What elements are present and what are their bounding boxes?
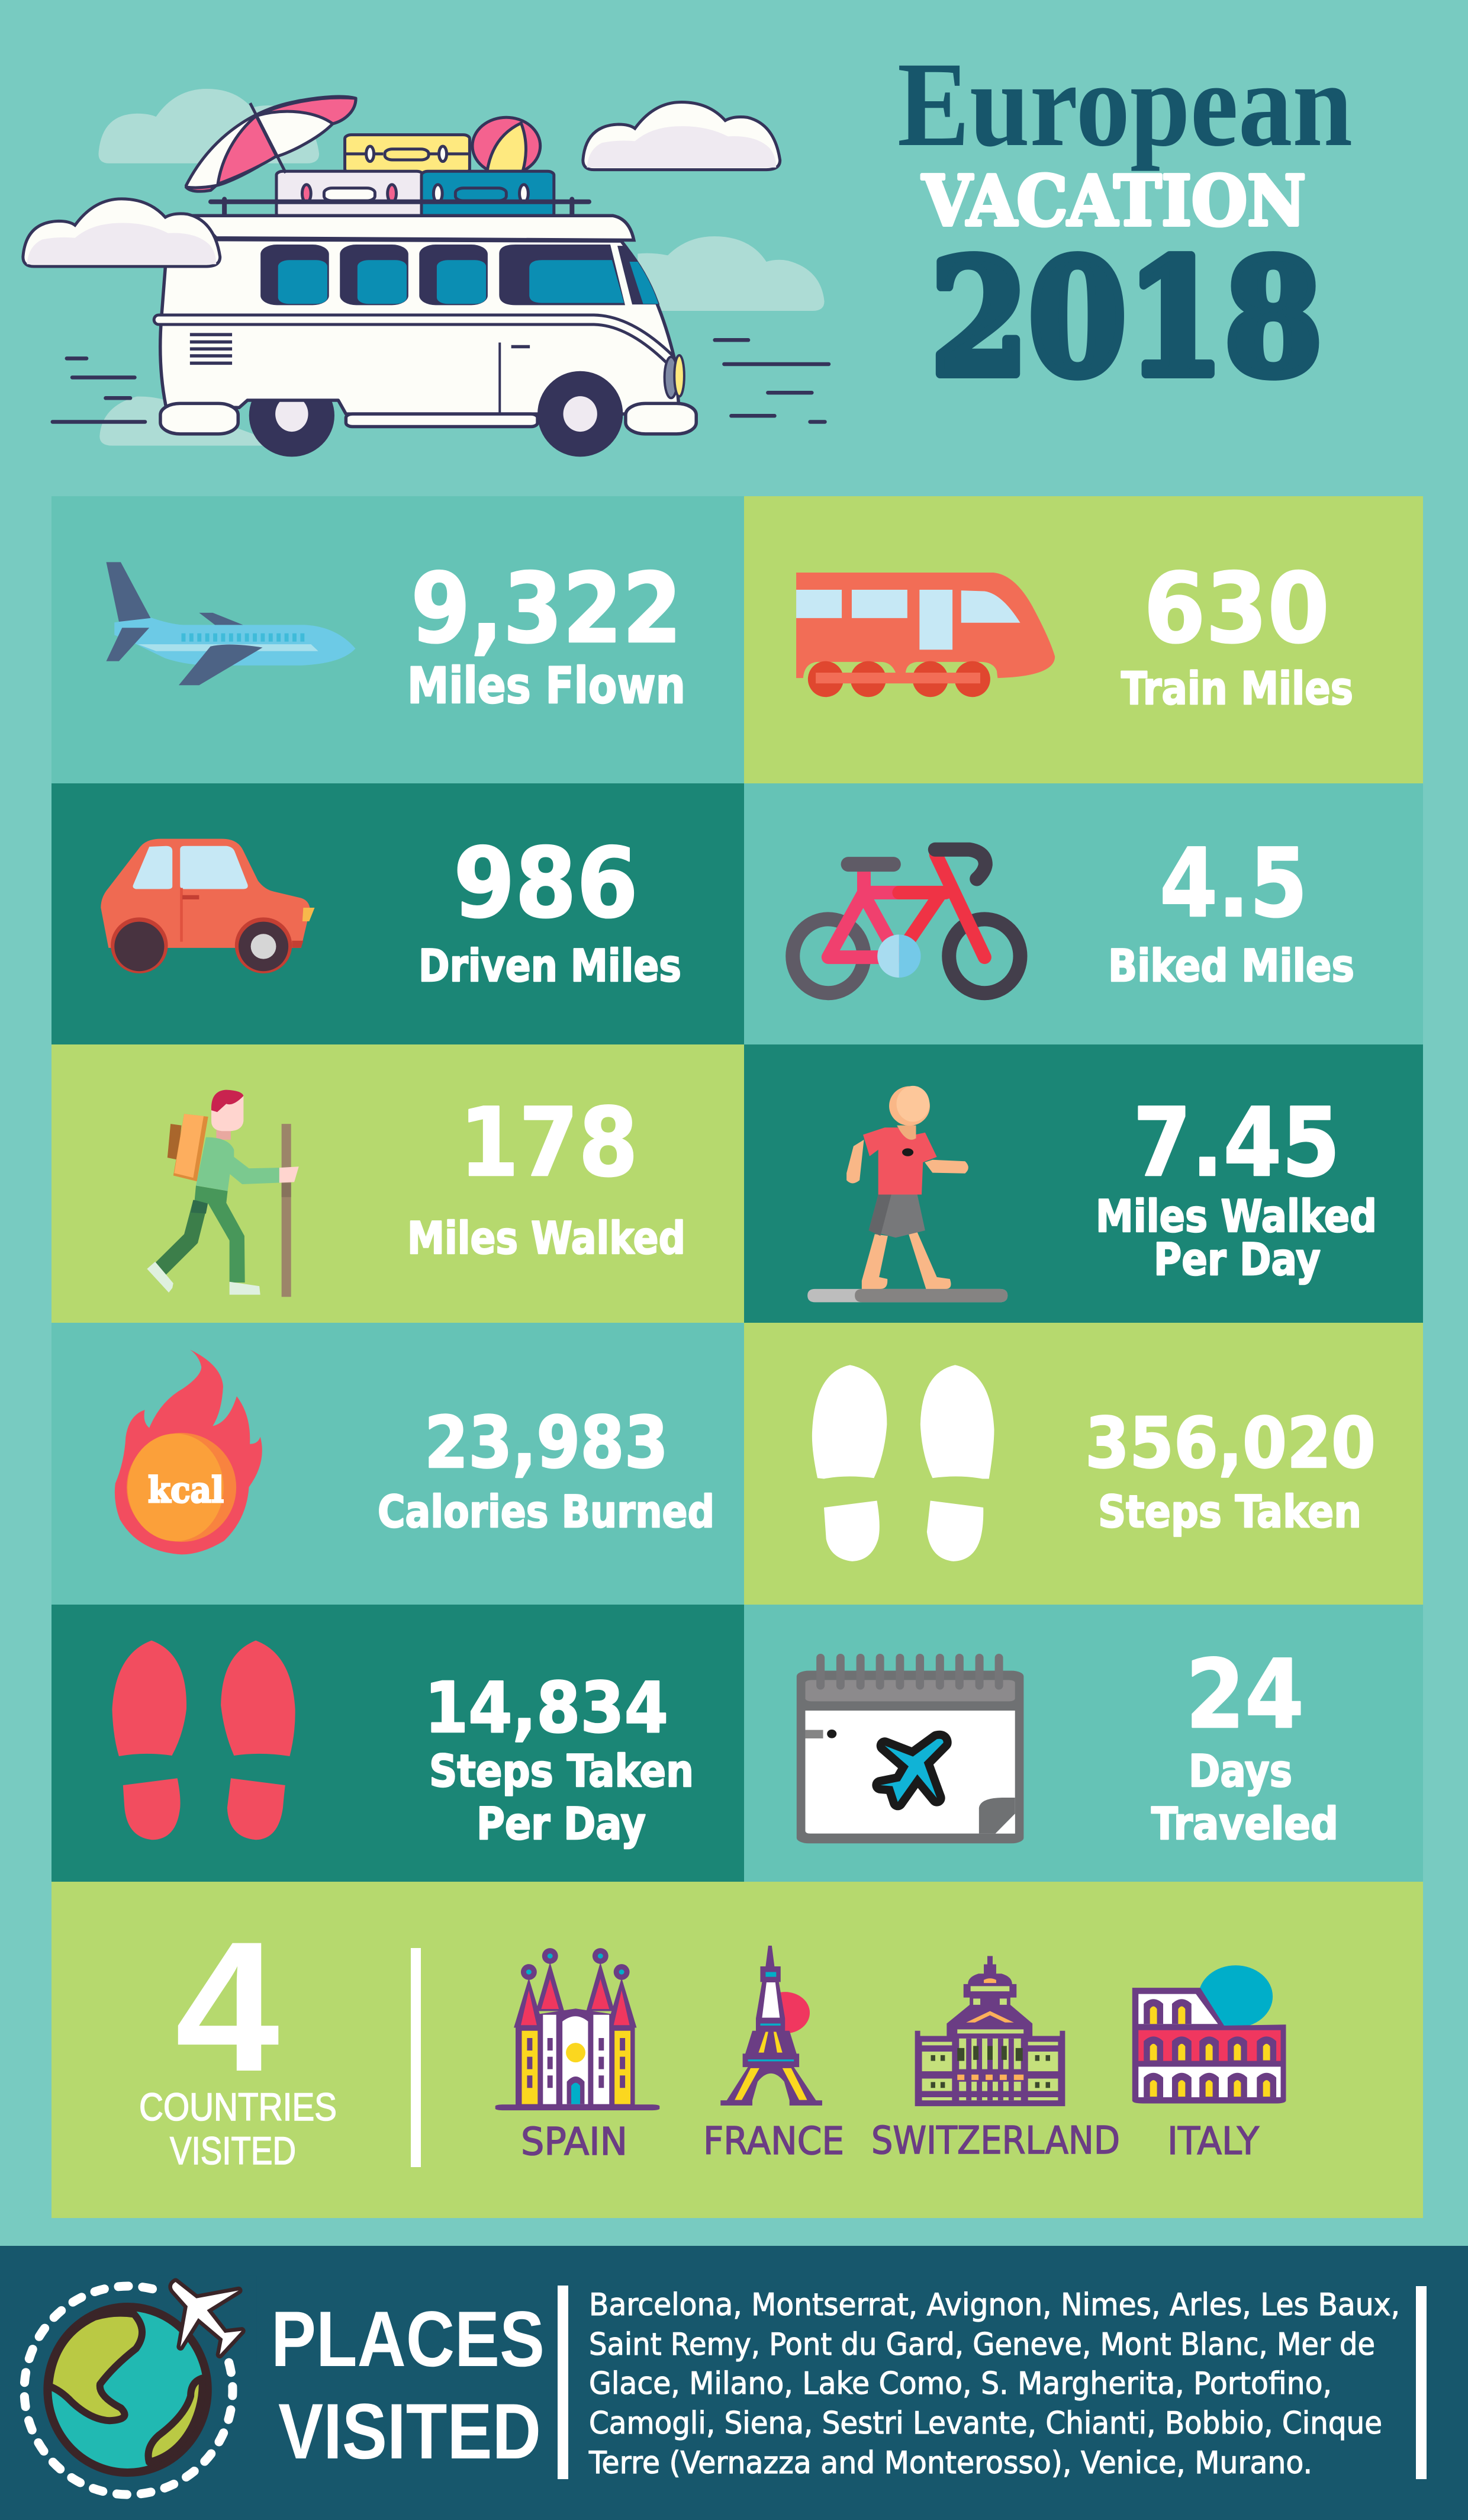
icon: Spain cathedral	[495, 1948, 659, 2110]
pale background clouds	[98, 89, 825, 446]
panel: steps taken	[744, 1323, 1423, 1605]
label: Calories Burned: Calories Burned	[378, 1486, 714, 1538]
bumpers and sill	[160, 403, 696, 434]
text block: list of places: Camogli, Siena, Sestri Levante, Chianti, Bobbio, Cinque	[589, 2406, 1382, 2441]
front wheel	[537, 371, 623, 457]
stat: 4 countries: VISITED	[170, 2129, 296, 2172]
label: Miles Walked Per Day	[1096, 1190, 1377, 1285]
panel: countries visited	[51, 1882, 1423, 2218]
vent and door	[190, 335, 530, 363]
label: Days Traveled: Days	[1189, 1745, 1292, 1797]
label: Driven Miles: Driven Miles	[418, 940, 681, 992]
icon: airplane	[106, 562, 355, 685]
label: ITALY: ITALY	[1167, 2120, 1260, 2164]
label: SWITZERLAND: SWITZERLAND	[871, 2119, 1120, 2163]
text block: list of places: Barcelona, Montserrat, Avignon, Nimes, Arles, Les Baux,	[589, 2287, 1400, 2323]
panel: driven miles	[51, 783, 744, 1044]
icon: white footprints	[812, 1365, 994, 1561]
panel: days traveled	[744, 1605, 1423, 1882]
stat: 356,020: 356,020	[1085, 1402, 1376, 1484]
headlight	[665, 355, 684, 398]
icon: bicycle	[793, 850, 1020, 993]
text block: list of places	[588, 2287, 1400, 2481]
icon: hiker	[147, 1090, 299, 1297]
label: Steps Taken: Steps Taken	[1098, 1486, 1361, 1538]
van windows	[260, 245, 659, 305]
panel: miles walked per day	[744, 1044, 1423, 1323]
label: Steps Taken Per Day: Steps Taken	[429, 1745, 694, 1797]
illustration: camper van with luggage and clouds	[23, 89, 829, 457]
label: Train Miles: Train Miles	[1121, 662, 1353, 715]
label: Steps Taken Per Day	[429, 1745, 694, 1850]
label: Miles Walked: Miles Walked	[407, 1212, 685, 1264]
stat: 14,834: 14,834	[424, 1667, 668, 1748]
heading: PLACES VISITED: VISITED	[278, 2388, 541, 2476]
van body	[160, 239, 679, 414]
luggage on the roof	[276, 117, 554, 217]
stat: 178: 178	[459, 1087, 638, 1198]
icon: car	[101, 839, 315, 973]
stat: 630: 630	[1144, 553, 1329, 665]
icon: walking person	[807, 1086, 1007, 1302]
label: Miles Walked Per Day: Per Day	[1154, 1233, 1321, 1285]
stat: 24: 24	[1186, 1639, 1304, 1750]
label: SPAIN: SPAIN	[521, 2120, 627, 2164]
icon: Switzerland palace	[915, 1956, 1065, 2106]
stat: 986: 986	[453, 828, 638, 940]
stat: 23,983: 23,983	[424, 1402, 668, 1484]
icon: flame with kcal: kcal	[148, 1470, 224, 1511]
title line: VACATION: VACATION	[922, 161, 1306, 242]
label: Days Traveled: Traveled	[1151, 1798, 1338, 1850]
text block: list of places: Terre (Vernazza and Monterosso), Venice, Murano.	[588, 2445, 1312, 2481]
stat: 7.45: 7.45	[1133, 1087, 1340, 1198]
label: Steps Taken Per Day: Per Day	[477, 1798, 646, 1850]
title	[897, 37, 1353, 412]
icon: red footprints	[112, 1641, 295, 1840]
stat: 4 countries	[139, 1904, 337, 2172]
van roof	[175, 216, 634, 240]
panel: miles flown	[51, 496, 744, 783]
icon: calendar with plane	[797, 1658, 1023, 1843]
label: Miles Flown: Miles Flown	[407, 657, 685, 715]
belt line	[159, 320, 669, 358]
rear wheel	[249, 374, 334, 457]
icon: Italy colosseum	[1132, 1965, 1286, 2104]
white clouds	[23, 102, 780, 266]
stat: 9,322: 9,322	[411, 553, 682, 665]
stat: 4 countries: COUNTRIES	[139, 2085, 337, 2129]
icon: globe with plane	[24, 2275, 257, 2495]
icon: train	[796, 573, 1055, 697]
panel: steps taken per day	[51, 1605, 744, 1882]
panel: miles walked	[51, 1044, 744, 1323]
label: Biked Miles: Biked Miles	[1108, 940, 1354, 992]
text block: list of places: Glace, Milano, Lake Como, S. Margherita, Portofino,	[589, 2366, 1332, 2402]
beach umbrella	[186, 97, 356, 191]
panel: calories burned	[51, 1323, 744, 1605]
panel: biked miles	[744, 783, 1423, 1044]
stat: 4.5: 4.5	[1160, 828, 1308, 938]
icon: flame with kcal	[115, 1349, 262, 1554]
title line: 2018: 2018	[931, 225, 1322, 412]
label: FRANCE: FRANCE	[703, 2120, 844, 2164]
speed lines	[53, 340, 829, 422]
roof rack	[211, 199, 589, 216]
heading: PLACES VISITED: PLACES	[271, 2296, 545, 2383]
heading: PLACES VISITED	[271, 2296, 545, 2476]
stat: 4 countries: 4	[175, 1904, 281, 2110]
panel: train miles	[744, 496, 1423, 783]
label: Days Traveled	[1151, 1745, 1338, 1850]
label: Miles Walked Per Day: Miles Walked	[1096, 1190, 1377, 1242]
icon: France Eiffel tower	[720, 1946, 822, 2106]
panel: places visited	[0, 2246, 1468, 2520]
title line: European: European	[897, 37, 1353, 172]
text block: list of places: Saint Remy, Pont du Gard, Geneve, Mont Blanc, Mer de	[589, 2327, 1375, 2362]
